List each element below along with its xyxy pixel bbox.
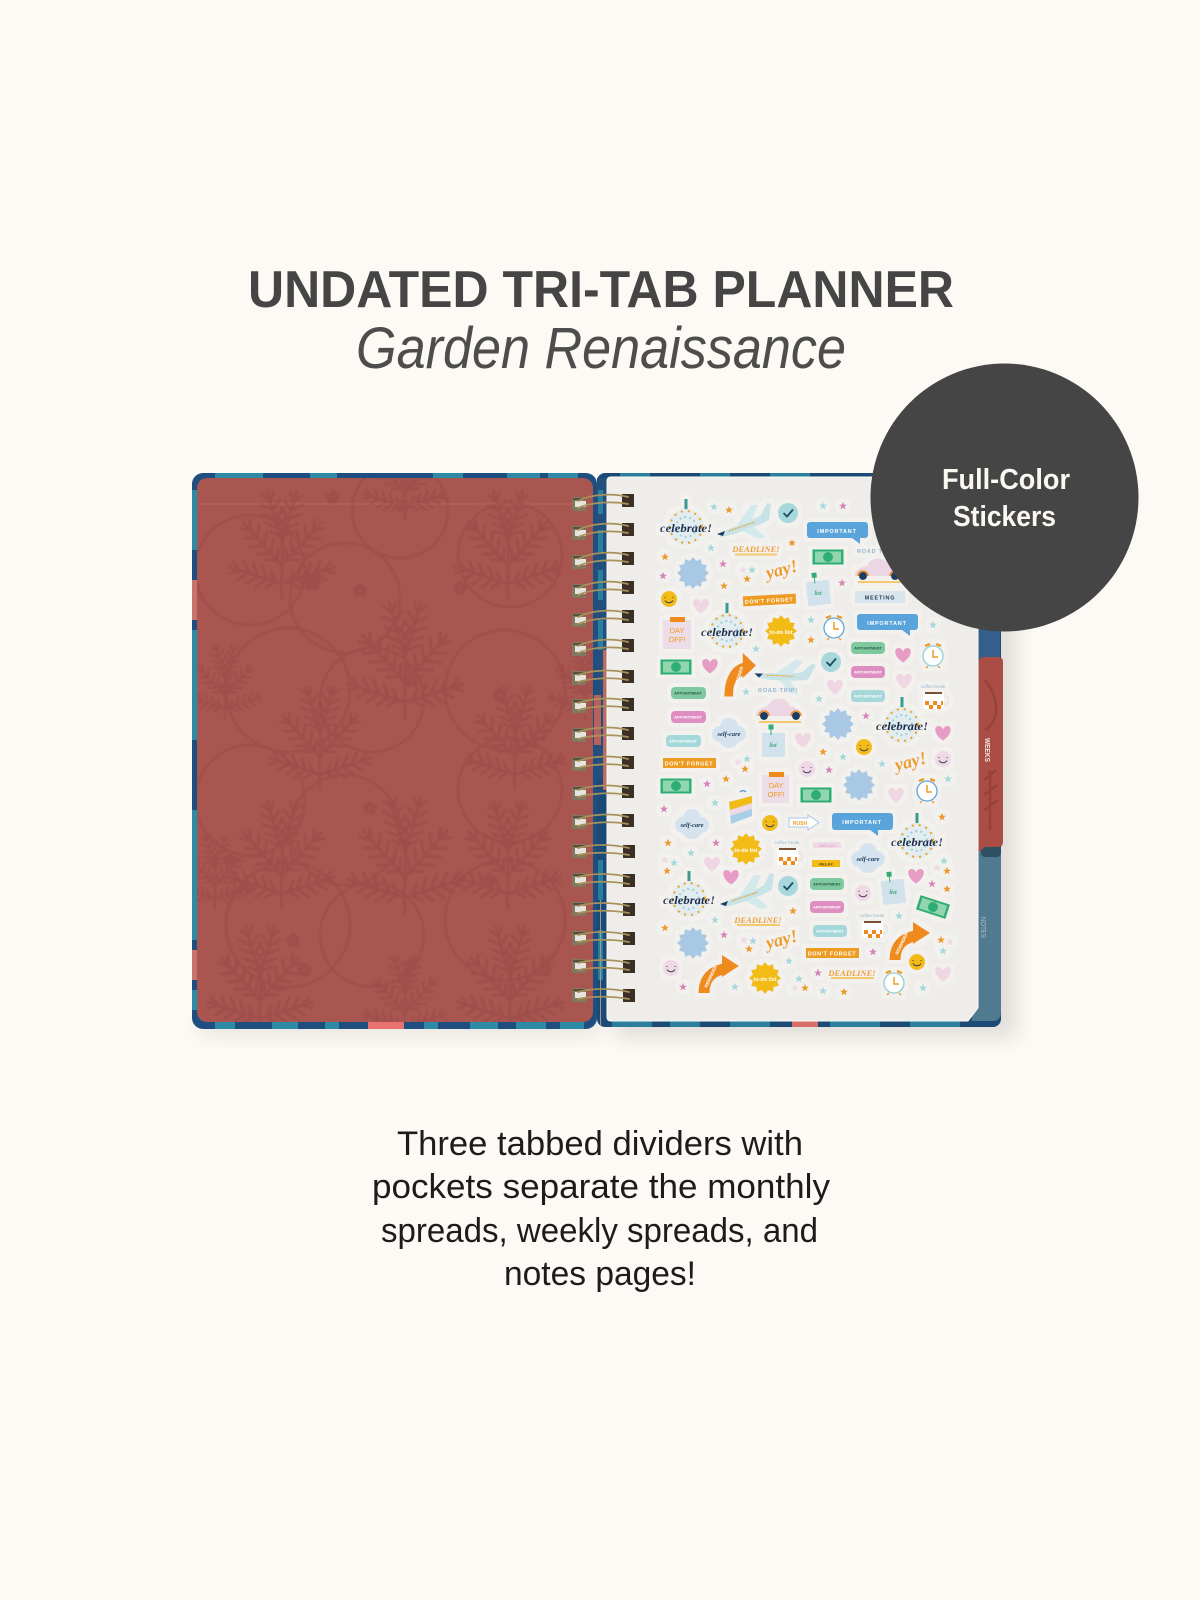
sticker: to-do list badges: to-do list xyxy=(769,630,793,636)
sticker: don't forget labels: DON'T FORGET xyxy=(745,597,794,606)
sticker: important speech bubbles: IMPORTANT xyxy=(817,529,857,535)
sticker: deadline labels: DEADLINE! xyxy=(731,544,780,554)
sticker: coffee break cups: coffee break xyxy=(775,840,800,845)
sticker: reminder arrows: REMINDER xyxy=(703,964,718,988)
sticker: coffee break cups: coffee break xyxy=(921,684,946,689)
subtitle: Garden Renaissance xyxy=(356,316,846,381)
sticker: to-do list badges: to-do list xyxy=(734,848,758,854)
sticker: yay lettering: yay! xyxy=(762,556,799,583)
sticker: celebrate disco balls: celebrate! xyxy=(701,625,753,639)
sticker: appointment labels: APPOINTMENT xyxy=(669,740,697,744)
sticker: meeting label: MEETING xyxy=(865,596,895,602)
sticker: coffee break cups: coffee break xyxy=(860,913,885,918)
sticker: don't forget labels xyxy=(663,594,859,958)
sticker: road trip cars: ROAD TRIP! xyxy=(758,688,798,694)
sticker: celebrate disco balls xyxy=(660,499,943,917)
sticker: rush arrow xyxy=(789,815,819,830)
drop shadow xyxy=(200,490,1017,1038)
panel: right cover, spine and tabs xyxy=(594,473,1003,1027)
sticker: celebrate disco balls: celebrate! xyxy=(663,893,715,907)
sticker: reminder arrows xyxy=(703,653,930,993)
divider tab: notes xyxy=(972,843,1001,1021)
sticker: meeting label xyxy=(855,591,905,603)
description text block: notes pages! xyxy=(504,1255,696,1293)
panel: left inside cover xyxy=(192,473,597,1029)
sticker: don't forget labels: DON'T FORGET xyxy=(808,952,856,958)
page xyxy=(607,477,978,1021)
sticker: appointment labels: APPOINTMENT xyxy=(674,692,702,696)
sticker: unplug and relax ribbons: UNPLUG xyxy=(819,843,835,848)
sticker: yay lettering: yay! xyxy=(762,926,799,953)
divider tab: months (top) xyxy=(972,477,1000,662)
sticker: day off notes: DAY xyxy=(769,781,783,790)
sticker: deadline labels xyxy=(731,544,876,979)
divider tab: weeks: WEEKS xyxy=(983,738,992,762)
sticker: unplug and relax ribbons xyxy=(812,842,841,867)
description text block: pockets separate the monthly xyxy=(372,1168,830,1206)
sticker: deadline labels: DEADLINE! xyxy=(827,968,876,978)
icon: scattered stars xyxy=(659,502,954,995)
sticker: celebrate disco balls: celebrate! xyxy=(660,521,712,535)
sticker: important speech bubbles: IMPORTANT xyxy=(867,621,907,627)
title: UNDATED TRI-TAB PLANNER xyxy=(248,261,954,319)
sticker: yay lettering: yay! xyxy=(891,748,928,775)
icon: check marks xyxy=(778,503,841,896)
sticker: self-care clouds: self-care xyxy=(855,856,880,863)
icon: alarm clocks xyxy=(824,616,943,995)
sticker: celebrate disco balls: celebrate! xyxy=(891,835,943,849)
sticker: appointment labels: APPOINTMENT xyxy=(813,906,841,910)
description text block: spreads, weekly spreads, and xyxy=(381,1212,818,1250)
sticker: self-care clouds xyxy=(675,718,885,873)
icon: smiley faces xyxy=(661,591,951,976)
inside cover endpaper with damask pattern xyxy=(197,478,593,1022)
sticker: self-care clouds: self-care xyxy=(679,822,704,829)
icon: money bills xyxy=(660,550,950,919)
spiral binding xyxy=(572,494,635,1002)
sticker: rush arrow: RUSH xyxy=(793,821,807,827)
sticker: to-do list badges xyxy=(730,615,797,994)
spine and back cover xyxy=(594,473,1001,1027)
sticker: don't forget labels: DON'T FORGET xyxy=(665,762,713,768)
sticker: important speech bubbles: IMPORTANT xyxy=(842,820,882,826)
sticker: day off notes: OFF! xyxy=(668,635,686,644)
description text block: Three tabbed dividers with xyxy=(397,1125,803,1163)
sticker: list notes: list xyxy=(889,890,897,896)
callout: full-color stickers badge xyxy=(870,364,1138,632)
sticker: self-care clouds: self-care xyxy=(716,731,741,738)
sticker: list notes: list xyxy=(769,743,777,749)
sticker: appointment labels: APPOINTMENT xyxy=(854,694,882,698)
sticker: birthday cake xyxy=(729,791,752,824)
callout: full-color stickers badge: Stickers xyxy=(953,501,1056,533)
sticker: list notes: list xyxy=(814,591,822,597)
sticker: road trip cars xyxy=(756,549,900,723)
sticker: appointment labels: APPOINTMENT xyxy=(816,930,844,934)
sticker: yay lettering xyxy=(762,556,928,953)
sticker: appointment labels: APPOINTMENT xyxy=(813,882,841,886)
icon: hearts xyxy=(693,599,951,982)
sticker: important speech bubbles xyxy=(807,522,918,836)
sticker: day off notes: OFF! xyxy=(767,790,785,799)
sticker: day off notes xyxy=(663,617,789,803)
sticker: reminder arrows: REMINDER xyxy=(894,931,909,955)
sticker: coffee break cups xyxy=(775,684,948,938)
divider tab: notes: NOTES xyxy=(979,917,988,938)
left cover board xyxy=(192,473,597,1029)
sticker: reminder arrows: REMINDER xyxy=(732,665,745,690)
panel: sticker sheet page xyxy=(607,477,978,1021)
sticker: appointment labels: APPOINTMENT xyxy=(674,716,702,720)
sticker: appointment labels xyxy=(666,642,885,937)
sticker set xyxy=(659,499,954,995)
sticker: appointment labels: APPOINTMENT xyxy=(854,646,882,650)
sticker: appointment labels: APPOINTMENT xyxy=(854,670,882,674)
icon: burst badges xyxy=(677,557,875,959)
sticker: day off notes: DAY xyxy=(670,626,684,635)
callout: full-color stickers badge: Full-Color xyxy=(942,464,1070,496)
sticker: deadline labels: DEADLINE! xyxy=(733,915,782,925)
description text block xyxy=(372,1125,830,1293)
icon: airplanes xyxy=(717,503,816,909)
sticker: to-do list badges: to-do list xyxy=(753,977,777,983)
sticker: unplug and relax ribbons: RELAX xyxy=(819,862,833,866)
sticker: list notes xyxy=(762,572,906,905)
divider tab: weeks xyxy=(975,657,1003,852)
sticker: celebrate disco balls: celebrate! xyxy=(876,719,928,733)
sticker: road trip cars: ROAD TRIP! xyxy=(857,549,897,555)
open planner photo xyxy=(176,433,1017,1040)
